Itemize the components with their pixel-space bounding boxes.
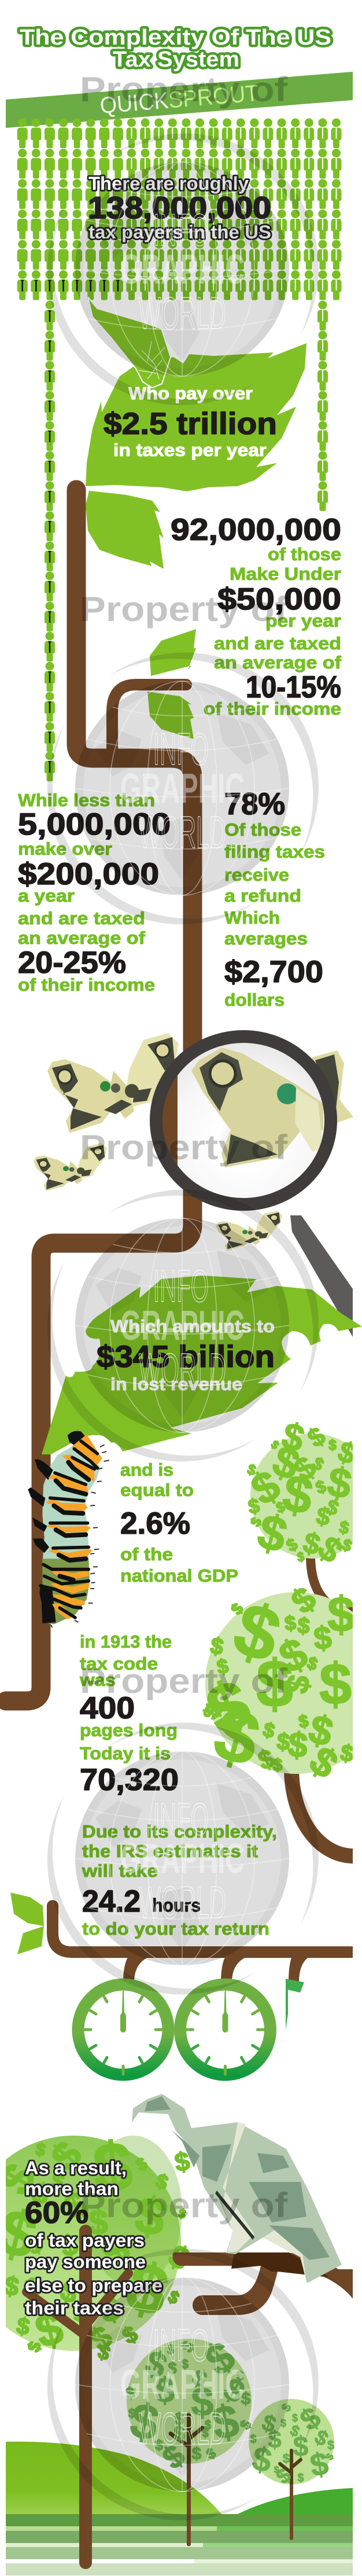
title: The Complexity Of The US	[20, 25, 331, 50]
branch: clocks	[53, 1906, 362, 1982]
dollar tree D: $	[205, 2418, 212, 2432]
dollar tree A: $	[267, 1435, 306, 1490]
watermark: globe 1	[47, 70, 319, 405]
stat block: 5,000,000: make over	[18, 839, 112, 859]
text: tree C: their taxes	[25, 2298, 124, 2318]
dollar tree C: $	[14, 2313, 32, 2340]
dollar tree E: $	[323, 2452, 336, 2462]
dollar tree B: $	[208, 1633, 226, 1660]
dollar tree E: $	[249, 2439, 275, 2480]
dollar tree E: $	[258, 2410, 279, 2438]
leaf text	[104, 383, 277, 460]
dollar tree C: $	[94, 2288, 125, 2331]
stat block: tax code pages: Today it is	[80, 1743, 171, 1763]
dollar tree C: $	[34, 2140, 47, 2160]
dollar tree C: $	[30, 2301, 68, 2358]
leaf text: Which amounts to	[110, 1316, 275, 1336]
dollar tree A: $	[309, 1454, 327, 1475]
stat block: 78%: receive	[224, 865, 289, 885]
dollar tree A: $	[274, 1498, 287, 1517]
dollar tree D: $	[191, 2379, 213, 2424]
trunk and branches	[27, 2231, 128, 2563]
watermark: globe 4: GRAPHIC	[120, 1836, 245, 1882]
dollar tree C: $	[28, 2176, 53, 2211]
watermark: globe 2: INFO	[153, 723, 209, 774]
leaf: main with text	[86, 297, 306, 491]
stat block: GDP: national GDP	[120, 1566, 238, 1586]
leaf text: Who pay over	[128, 383, 253, 403]
dollar tree B: $	[312, 1619, 333, 1656]
magnifying glass	[156, 1030, 353, 1337]
butterfly: origami dollar large	[47, 1033, 179, 1133]
dollar tree C: $	[23, 2231, 47, 2260]
watermark: globe 3	[47, 1128, 319, 1461]
stat block: 24.2 hours: will take	[82, 1861, 158, 1881]
dollar tree A: $	[296, 1549, 305, 1564]
watermark: globe 5: Property of	[80, 2186, 288, 2225]
dollar tree C: $	[118, 2321, 142, 2350]
dollar tree B: $	[224, 1585, 290, 1679]
dollar tree A: $	[278, 1414, 309, 1460]
watermark: globe 2	[47, 590, 319, 924]
clock 3: partial	[286, 1979, 304, 2030]
dollar tree D: $	[241, 2389, 251, 2409]
dollar tree A: $	[300, 1526, 324, 1561]
dollar tree C: $	[60, 2184, 91, 2226]
intro text: There are roughly	[88, 173, 249, 194]
intro text: tax payers in the US	[88, 222, 271, 242]
leaf: small upper	[150, 629, 196, 676]
dollar tree B: $	[256, 1647, 293, 1721]
dollar tree C	[0, 2127, 196, 2563]
text: tree C: 60%	[25, 2196, 88, 2230]
dollar tree D	[124, 2332, 255, 2544]
text: tree C: pay someone	[25, 2251, 146, 2272]
stat block: GDP: equal to	[120, 1480, 194, 1500]
stat block: 5,000,000: While less than	[18, 790, 155, 810]
dollar tree E: $	[268, 2426, 282, 2453]
dollar tree B: $	[297, 1614, 311, 1639]
stat block: 92,000,000: and are taxed	[214, 633, 341, 653]
dollar tree E: $	[274, 2465, 279, 2475]
watermark: globe 5: GRAPHIC	[120, 2362, 245, 2408]
stat block: 24.2 hours: Due to its complexity,	[82, 1821, 277, 1842]
dollar tree A: $	[328, 1437, 337, 1453]
dollar tree B: $	[284, 1612, 297, 1635]
dollar tree A: $	[283, 1534, 301, 1556]
stat block: 5,000,000: of their income	[18, 975, 155, 995]
dollar tree E: $	[283, 2452, 290, 2465]
stat block: GDP	[120, 1460, 238, 1586]
banner: QuickSprout logo	[6, 72, 353, 128]
dollar tree A: $	[268, 1438, 281, 1452]
intro text	[88, 173, 271, 242]
dollar tree A	[246, 1421, 353, 1563]
stat block: 92,000,000: an average of	[214, 652, 342, 673]
stat block: tax code pages: pages long	[80, 1720, 178, 1740]
watermark: globe 2: GRAPHIC	[120, 766, 245, 812]
dollar tree C: $	[165, 2287, 183, 2309]
dollar tree B: $	[198, 1704, 224, 1722]
dollar tree D: $	[237, 2368, 243, 2383]
clock 1	[78, 1985, 168, 2075]
dollar tree C: $	[79, 2257, 95, 2281]
stat block: 78%: Which	[224, 907, 280, 928]
dollar tree B: $	[338, 1740, 356, 1767]
dollar tree B: $	[297, 1711, 310, 1732]
dollar tree C: $	[177, 2206, 187, 2222]
dollar tree A: $	[302, 1421, 331, 1453]
dollar tree B: $	[272, 1628, 315, 1682]
dollar tree C: $	[88, 2203, 108, 2242]
dollar tree C: $	[58, 2228, 80, 2263]
dollar tree E: $	[294, 2401, 327, 2438]
dollar tree B: $	[200, 1697, 228, 1724]
dollar tree B	[202, 1588, 353, 1778]
dollar tree A: $	[245, 1461, 258, 1479]
dollar tree B: $	[273, 1756, 283, 1774]
watermark: globe 2: WORLD	[139, 807, 226, 858]
dollar tree C: $	[56, 2274, 83, 2310]
text: tree C	[25, 2158, 162, 2318]
dollar tree A: $	[279, 1464, 317, 1526]
dollar tree E: $	[308, 2445, 331, 2483]
watermark: globe 5: INFO	[153, 2320, 209, 2371]
dollar tree C: $	[72, 2305, 84, 2325]
watermark: globe 3: Property of	[80, 1128, 288, 1167]
dollar tree E: $	[292, 2412, 298, 2424]
dollar tree D: $	[128, 2406, 135, 2420]
dollar tree B: $	[302, 1737, 346, 1787]
dollar tree A: $	[313, 1477, 329, 1498]
dollar tree A: $	[334, 1435, 360, 1471]
stat block: tax code pages: 400	[80, 1691, 135, 1725]
stat block: 92,000,000: Make Under	[230, 564, 341, 584]
dollar tree D: $	[155, 2437, 192, 2476]
watermark: globe 2: Property of	[80, 590, 288, 629]
stat block: 78%: averages	[224, 928, 308, 949]
dollar tree E: $	[271, 2463, 295, 2489]
leaf text: in taxes per year	[113, 440, 267, 460]
watermark: globe 4	[47, 1662, 319, 1994]
dollar tree D: $	[126, 2393, 163, 2452]
watermark: globe 4: WORLD	[139, 1877, 226, 1928]
stat block: 5,000,000: $200,000	[18, 857, 159, 891]
watermark: globe 1: Property of	[80, 70, 288, 109]
people grid: tax payers	[17, 118, 341, 300]
watermark: globe 5	[47, 2186, 319, 2520]
dollar tree B: $	[279, 1673, 317, 1696]
dollar tree C: $	[172, 2146, 192, 2177]
stat block: 5,000,000: an average of	[18, 928, 146, 948]
dollar tree E	[249, 2399, 336, 2538]
dollar tree E: $	[278, 2401, 294, 2415]
dollar tree D: $	[155, 2371, 175, 2410]
dollar tree C: $	[2, 2270, 21, 2302]
trunk: main tree	[6, 490, 193, 1701]
watermark: globe 4: Property of	[80, 1662, 288, 1700]
stat block: 78%: filing taxes	[224, 841, 325, 862]
dollar tree D: $	[167, 2343, 174, 2357]
dollar tree C: $	[19, 2272, 51, 2300]
dollar tree E: $	[250, 2433, 257, 2446]
dollar tree B: $	[286, 1725, 309, 1765]
dollar tree A: $	[247, 1515, 265, 1530]
text: tree C: more than	[25, 2178, 119, 2199]
dollar tree E: $	[287, 2421, 302, 2441]
dollar tree C: $	[131, 2185, 169, 2248]
stat block: GDP: 2.6%	[120, 1506, 190, 1541]
stat block: 92,000,000: $50,000	[217, 582, 341, 616]
dollar tree D: $	[175, 2410, 184, 2428]
stat block: 24.2 hours: hours	[152, 1895, 201, 1916]
dollar tree D: $	[196, 2332, 243, 2385]
dollar tree C: $	[24, 2339, 45, 2354]
clock 2	[180, 1985, 271, 2075]
dollar tree A: $	[339, 1535, 354, 1555]
stat block: tax code pages: tax code	[80, 1653, 158, 1674]
stat block: 24.2 hours: the IRS estimates it	[82, 1841, 258, 1861]
dollar tree C: $	[49, 2168, 67, 2196]
watermark: globe 1: WORLD	[139, 288, 226, 339]
intro text: 138,000,000	[88, 191, 271, 225]
dollar tree B: $	[327, 1587, 355, 1642]
watermark: globe 1: GRAPHIC	[120, 247, 245, 293]
watermark: globe 1: INFO	[153, 204, 209, 255]
stat block: 78%: 78%	[224, 787, 285, 821]
butterfly: below lens	[216, 1211, 282, 1251]
origami bird on branch	[132, 2094, 353, 2315]
leaf text	[97, 1316, 275, 1394]
stat block: 78%: Of those	[224, 820, 301, 840]
text: tree C: else to prepare	[25, 2275, 162, 2296]
dollar tree B: $	[305, 1653, 320, 1674]
dollar tree C: $	[162, 2237, 196, 2277]
leaves: bottom left pair	[10, 1893, 44, 1954]
stat block: GDP: of the	[120, 1544, 173, 1564]
leaf text: in lost revenue	[110, 1374, 242, 1394]
stat block: 5,000,000: 5,000,000	[18, 807, 171, 841]
dollar tree D: $	[237, 2417, 255, 2432]
leaf text: $2.5 trillion	[104, 407, 277, 441]
dollar tree D: $	[141, 2343, 172, 2386]
dollar tree A: $	[246, 1494, 261, 1519]
dollar tree E: $	[327, 2438, 334, 2453]
stat block: 92,000,000: per year	[265, 611, 341, 631]
dollar tree C: $	[93, 2227, 139, 2276]
dollar tree D: $	[168, 2359, 177, 2377]
people column: left	[45, 301, 55, 781]
butterfly: origami dollar small	[34, 1143, 107, 1191]
watermark: globe 3: WORLD	[139, 1344, 226, 1395]
stat block: 78%: $2,700	[224, 955, 323, 989]
title: Tax System	[113, 47, 239, 72]
stat block: 92,000,000: of their income	[204, 699, 341, 719]
stat block: 5,000,000	[18, 790, 171, 995]
dollar tree E: $	[311, 2424, 333, 2451]
dollar tree B: $	[227, 1600, 247, 1618]
dollar tree D: $	[178, 2338, 199, 2355]
dollar tree E: $	[297, 2472, 304, 2485]
branch: tree A	[311, 1556, 354, 1612]
ground: hills and stripes	[6, 2442, 353, 2575]
dollar tree C: $	[133, 2154, 151, 2175]
stat block: 24.2 hours: to do your tax return	[82, 1919, 269, 1939]
dollar tree C: $	[153, 2169, 171, 2195]
dollar tree C: $	[90, 2127, 135, 2208]
branch: upper	[112, 685, 186, 752]
branch: tree B	[291, 1768, 354, 1856]
stat block: 24.2 hours	[82, 1821, 277, 1939]
dollar tree D: $	[204, 2445, 219, 2463]
stat block: 92,000,000: 10-15%	[246, 670, 341, 704]
butterfly: right of lens	[300, 1050, 353, 1166]
stat block: 78%	[224, 787, 325, 1010]
dollar tree D: $	[202, 2427, 209, 2440]
dollar tree D: $	[192, 2445, 202, 2463]
stat block: 5,000,000: a year	[18, 885, 75, 906]
dollar tree E: $	[280, 2417, 286, 2429]
text: tree C: As a result,	[25, 2158, 127, 2178]
stat block: 78%: a refund	[224, 885, 301, 906]
dollar tree D: $	[217, 2371, 251, 2410]
dollar tree A: $	[324, 1458, 355, 1508]
leaf: bitten by caterpillar with text	[42, 1276, 362, 1454]
dollar tree B: $	[254, 1743, 278, 1776]
dollar tree C: $	[42, 2133, 91, 2179]
watermark: globe 3: GRAPHIC	[120, 1303, 245, 1349]
leaf: under main	[86, 491, 164, 569]
stat block: 78%: dollars	[224, 990, 285, 1010]
title	[20, 25, 331, 72]
branch: bird perch	[172, 2252, 353, 2315]
dollar tree D: $	[182, 2357, 189, 2372]
dollar tree B: $	[197, 1664, 260, 1750]
dollar tree B: $	[206, 1690, 268, 1783]
dollar tree B: $	[276, 1729, 291, 1755]
stat block: 24.2 hours: 24.2	[82, 1884, 141, 1919]
dollar tree A: $	[311, 1528, 350, 1570]
stat block: tax code pages: in 1913 the	[80, 1631, 172, 1652]
stat block: 5,000,000: 20-25%	[18, 946, 126, 980]
dollar tree B: $	[215, 1655, 230, 1679]
stat block: tax code pages: was	[79, 1670, 116, 1690]
dollar tree D: $	[208, 2394, 243, 2450]
banner: QuickSprout logo: QUICKSPROUT	[99, 80, 260, 119]
dollar tree A: $	[338, 1517, 350, 1538]
dollar tree D: $	[124, 2383, 136, 2403]
dollar tree C: $	[84, 2318, 119, 2358]
dollar tree A: $	[252, 1504, 293, 1564]
dollar tree B: $	[304, 1706, 338, 1755]
stat block: 92,000,000: 92,000,000	[171, 513, 341, 547]
stat block: 92,000,000	[171, 513, 342, 719]
watermark: globe 3: INFO	[153, 1261, 209, 1311]
watermark: globe 4: INFO	[153, 1794, 209, 1844]
dollar tree B: $	[261, 1718, 277, 1743]
dollar tree D: $	[155, 2437, 163, 2453]
dollar tree D: $	[173, 2423, 185, 2445]
stat block: GDP: and is	[120, 1460, 173, 1480]
dollar tree B: $	[319, 1652, 352, 1717]
dollar tree A: $	[286, 1449, 323, 1488]
dollar tree A: $	[314, 1502, 333, 1531]
stat block: tax code pages	[79, 1631, 179, 1797]
leaf text: $345 billion	[97, 1340, 275, 1374]
stat block: 5,000,000: and are taxed	[18, 908, 145, 928]
stat block: tax code pages: 70,320	[80, 1763, 179, 1797]
dollar tree A: $	[323, 1495, 342, 1520]
dollar tree D: $	[189, 2364, 210, 2393]
stat block: 92,000,000: of those	[268, 544, 341, 564]
watermark: globe 5: WORLD	[139, 2403, 226, 2454]
people column: right	[317, 301, 328, 511]
text: tree C: of tax payers	[25, 2230, 145, 2251]
leaf: below branch	[147, 692, 194, 739]
dollar tree C: $	[119, 2247, 176, 2331]
caterpillar	[28, 1431, 109, 1627]
dollar tree B: $	[284, 1579, 323, 1621]
dollar tree E: $	[293, 2432, 309, 2462]
dollar tree A: $	[243, 1460, 288, 1515]
dollar tree C: $	[95, 2340, 113, 2365]
